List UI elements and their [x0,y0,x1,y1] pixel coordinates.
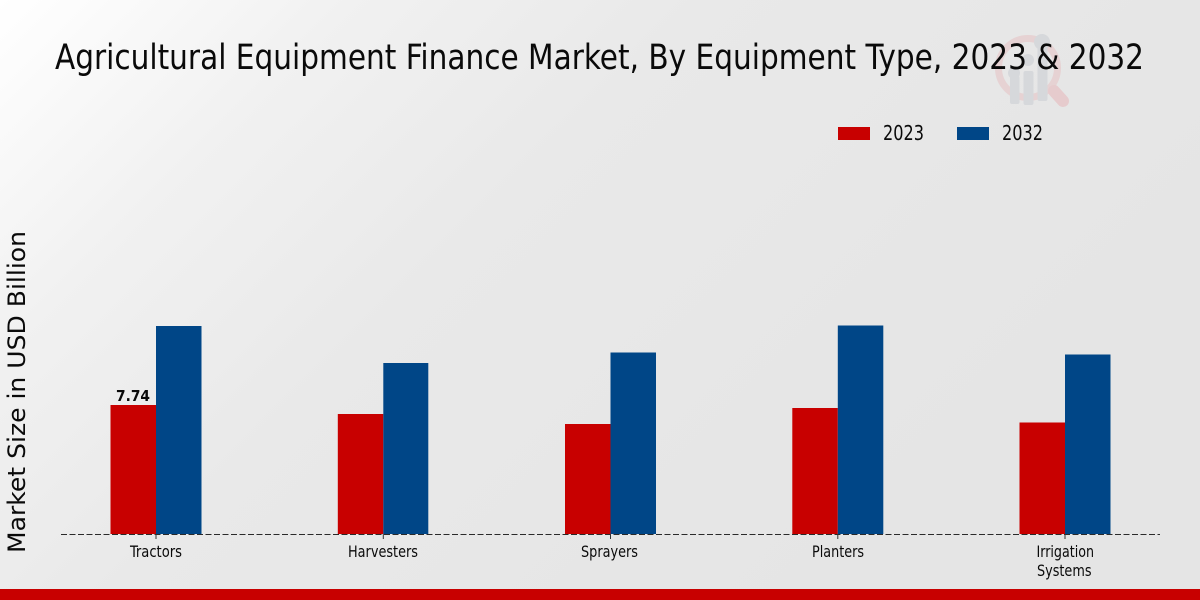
legend item: 2032 [957,121,1043,145]
category labels: Sprayers [581,542,638,561]
bars: Harvesters [338,363,428,534]
category labels: Irrigation [1036,542,1094,561]
category labels: Planters [812,542,864,561]
bars: Irrigation Systems [1020,354,1110,534]
title: Agricultural Equipment Finance Market, By Equipment Type, 2023 & 2032 [55,38,1144,78]
legend item: 2023: 2023 [883,121,924,145]
legend item: 2023 [838,121,924,145]
bars: Sprayers [565,352,656,534]
category labels: Tractors [129,542,182,561]
value label: 7.74: 7.74 [116,387,150,405]
legend [838,121,1043,145]
category labels [129,542,1094,580]
footer band [0,589,1200,600]
y axis label: Market Size in USD Billion [3,231,31,553]
bar chart [61,326,1160,580]
category labels: Harvesters [348,542,418,561]
x axis baseline [61,534,1160,536]
legend item: 2032: 2032 [1002,121,1043,145]
bars: Planters [792,326,883,534]
icon: magnifier watermark logo [998,34,1063,105]
category labels: Systems [1037,561,1092,580]
bars: Tractors [110,326,202,534]
